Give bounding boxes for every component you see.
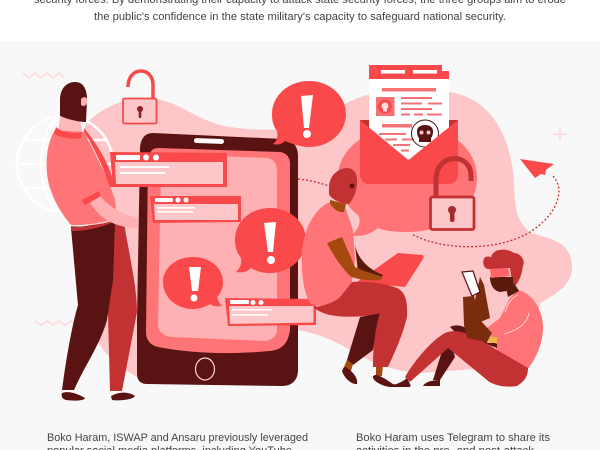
letter xyxy=(369,65,449,168)
right body text xyxy=(356,432,551,450)
near arm xyxy=(327,237,383,280)
person 1: masked man xyxy=(47,82,138,401)
icon: open padlock left xyxy=(123,71,156,124)
shoes xyxy=(62,392,85,401)
shoes xyxy=(342,367,357,384)
arm xyxy=(90,196,138,228)
alert bubble top xyxy=(272,81,346,147)
person 2: seated with laptop xyxy=(302,168,424,387)
intro text xyxy=(34,0,566,23)
dashed flight path xyxy=(298,176,559,247)
icon: globe xyxy=(17,116,113,212)
collar xyxy=(54,127,82,139)
intro text: the public's confidence in the state military's capacity to safeguard national security. xyxy=(94,11,506,23)
glasses xyxy=(490,268,510,278)
torso xyxy=(47,130,117,225)
hood xyxy=(60,82,87,122)
face xyxy=(490,277,513,292)
decorative zigzags and plus xyxy=(23,73,567,325)
back leg xyxy=(433,340,455,380)
torso xyxy=(487,290,543,370)
neck xyxy=(506,283,519,297)
shoes xyxy=(390,378,411,386)
thigh and leg xyxy=(405,331,528,387)
arm outline strip xyxy=(84,128,115,187)
icon: open padlock right xyxy=(430,158,474,230)
message window 1 xyxy=(110,152,227,187)
phone xyxy=(137,133,298,386)
alert bubble lower xyxy=(163,257,223,309)
left body text xyxy=(47,432,308,450)
back leg xyxy=(108,222,137,391)
waist xyxy=(450,325,497,348)
person 3: sitting with phone xyxy=(390,250,543,387)
laptop xyxy=(357,253,424,287)
front leg xyxy=(62,222,115,390)
left body text: Boko Haram, ISWAP and Ansaru previously leveraged xyxy=(47,432,308,444)
shirt folds xyxy=(504,295,529,334)
hood xyxy=(329,168,357,204)
phone xyxy=(462,271,480,296)
message window 2 xyxy=(150,196,241,223)
arms xyxy=(463,296,492,342)
skin at ankles xyxy=(344,360,353,371)
message window 3 xyxy=(225,298,316,326)
thigh xyxy=(313,282,407,367)
waist xyxy=(71,220,114,231)
hair xyxy=(483,250,524,285)
envelope back xyxy=(360,120,458,150)
right body text: Boko Haram uses Telegram to share its xyxy=(356,432,551,444)
background blob xyxy=(85,90,572,385)
alert bubble middle xyxy=(235,208,306,273)
envelope front xyxy=(360,120,458,184)
dark far arm xyxy=(355,245,383,279)
skull stamp xyxy=(412,120,438,147)
icon: paper plane xyxy=(520,159,554,178)
torso xyxy=(302,202,355,306)
coral bubble behind envelope xyxy=(338,125,477,236)
back leg xyxy=(347,313,380,365)
neck xyxy=(58,117,83,135)
neck xyxy=(330,200,346,212)
sleeve cuff xyxy=(82,191,101,205)
